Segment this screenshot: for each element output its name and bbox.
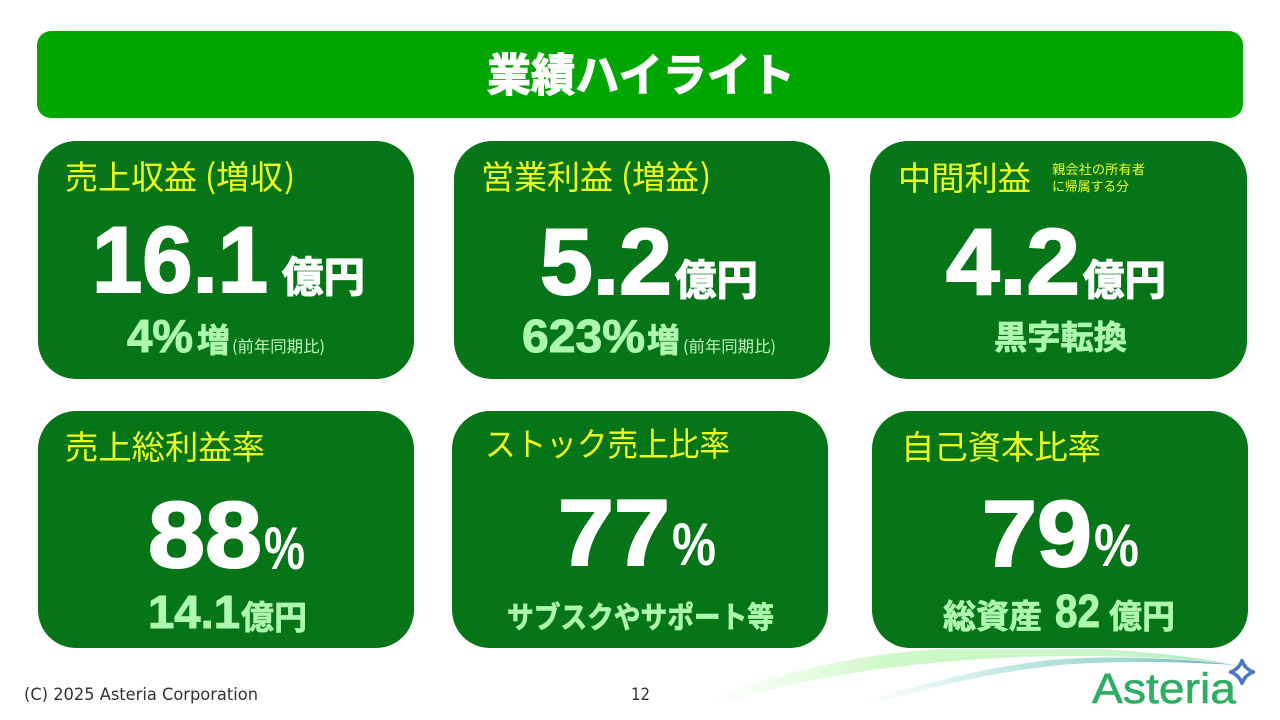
decorative swoosh: teal <box>860 658 1236 702</box>
gross profit amount: 億円 <box>241 591 307 639</box>
equity ratio value: % <box>1094 512 1139 579</box>
interim profit note: 親会社の所有者 <box>1052 159 1145 178</box>
stock revenue value: % <box>672 511 716 578</box>
gross margin label: 売上総利益率 <box>65 421 265 469</box>
equity ratio value: 79 <box>982 481 1092 586</box>
operating profit value: 5.2 <box>540 209 672 314</box>
panel: stock revenue ratio <box>452 411 828 648</box>
interim profit value: 4.2 <box>946 209 1080 314</box>
decorative swoosh: light green <box>705 649 1232 702</box>
operating profit change: 増 <box>647 314 680 362</box>
panel: equity ratio <box>872 411 1248 648</box>
revenue change: (前年同期比) <box>232 333 325 357</box>
interim profit value: 億円 <box>1083 247 1166 308</box>
revenue label <box>65 150 295 199</box>
interim profit status: 黒字転換 <box>994 311 1127 359</box>
title: 業績ハイライト <box>487 39 795 104</box>
icon: star <box>1230 660 1254 684</box>
revenue change <box>127 310 325 362</box>
revenue label: ( <box>205 150 216 198</box>
interim profit label: 中間利益 <box>898 152 1031 200</box>
revenue change: 増 <box>197 314 230 362</box>
total assets: 億円 <box>1109 590 1175 638</box>
operating profit change: (前年同期比) <box>683 333 776 357</box>
revenue label: 増収 <box>216 151 283 199</box>
panel: interim profit <box>870 141 1247 379</box>
revenue value: 億円 <box>282 244 365 305</box>
operating profit label: 増益 <box>632 151 699 199</box>
gross margin value: 88 <box>148 482 262 587</box>
operating profit label: ( <box>621 150 632 198</box>
footer copyright: (C) 2025 Asteria Corporation <box>24 685 258 705</box>
stock revenue note: サブスクやサポート等 <box>507 593 774 637</box>
operating profit value: 億円 <box>675 247 758 308</box>
operating profit change <box>522 310 776 362</box>
logo: Asteria: Asteria <box>1092 665 1236 713</box>
revenue value: 16.1 <box>92 207 268 312</box>
total assets <box>943 585 1175 638</box>
operating profit label: 営業利益 <box>481 151 613 199</box>
revenue change: 4% <box>127 310 193 362</box>
equity ratio value <box>982 481 1139 586</box>
panel: revenue <box>38 141 414 379</box>
revenue label: ) <box>284 150 295 198</box>
interim profit note: に帰属する分 <box>1052 176 1129 195</box>
gross margin value: % <box>264 515 305 582</box>
gross margin value <box>148 482 305 587</box>
total assets: 総資産 <box>943 590 1042 638</box>
stock revenue value <box>558 480 716 585</box>
title banner <box>37 31 1243 118</box>
panel: operating profit <box>454 141 830 379</box>
operating profit label: ) <box>700 150 711 198</box>
revenue label: 売上収益 <box>65 151 197 199</box>
stock revenue label: ストック売上比率 <box>485 418 730 466</box>
gross profit amount <box>148 586 307 639</box>
gross profit amount: 14.1 <box>148 586 240 638</box>
total assets: 82 <box>1055 585 1100 637</box>
revenue value <box>92 207 365 312</box>
stock revenue value: 77 <box>558 480 670 585</box>
panel: gross margin <box>38 411 414 648</box>
interim profit value <box>946 209 1166 314</box>
interim profit note <box>1052 159 1145 195</box>
operating profit value <box>540 209 758 314</box>
operating profit change: 623% <box>522 310 645 362</box>
operating profit label <box>481 150 711 199</box>
page number: 12 <box>631 685 650 705</box>
equity ratio label: 自己資本比率 <box>901 421 1101 469</box>
